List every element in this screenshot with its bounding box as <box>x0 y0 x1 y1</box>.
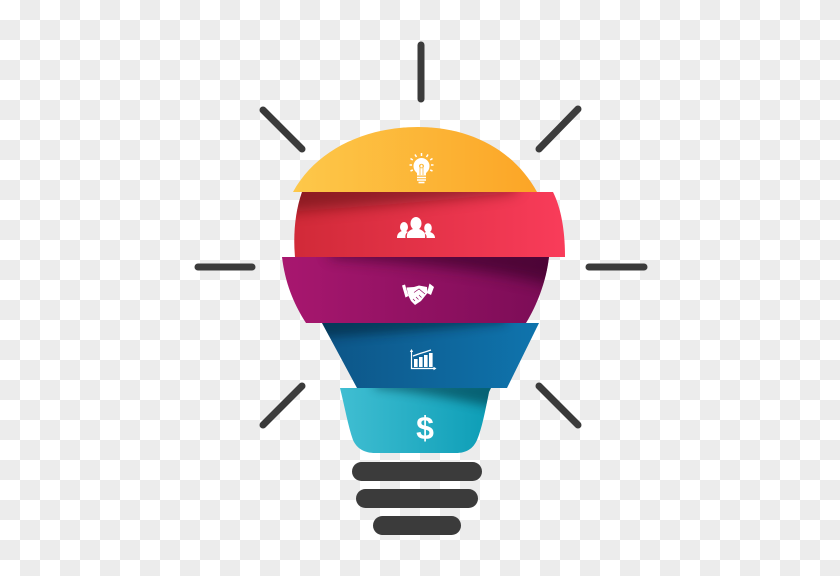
segment: purple band <box>282 257 549 323</box>
segment: red band <box>294 192 565 257</box>
segment: teal band <box>340 388 491 453</box>
icon: growth chart <box>410 349 436 370</box>
bulb base <box>352 462 482 535</box>
segment: yellow bulb top <box>293 127 537 192</box>
light rays <box>198 45 644 425</box>
icon: handshake <box>402 284 434 305</box>
icon: people group <box>397 217 435 238</box>
icon: light bulb <box>410 153 434 182</box>
icon: dollar sign: $ <box>416 410 434 446</box>
segment: blue band <box>322 323 539 388</box>
